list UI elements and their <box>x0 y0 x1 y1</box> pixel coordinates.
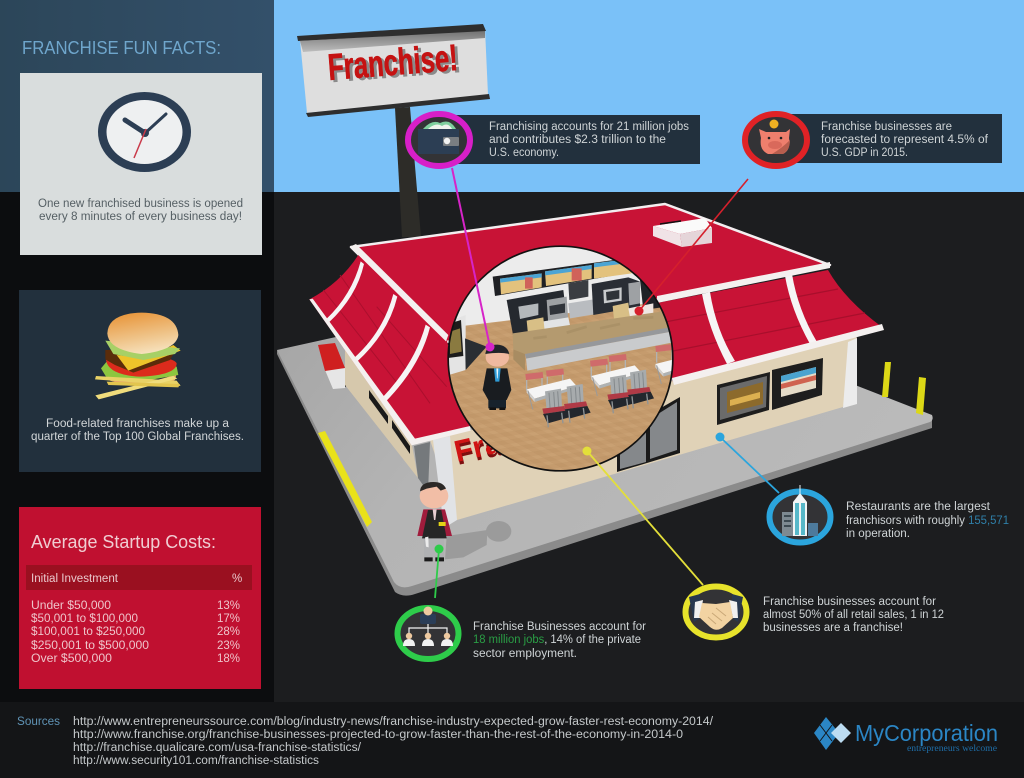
icon: burger and fries <box>95 313 181 399</box>
icon: wallet <box>408 114 470 166</box>
table rows: $100,001 to $250,000 <box>31 626 145 638</box>
right awning <box>657 262 884 385</box>
yellow pointer line <box>582 446 703 585</box>
callout: jobs and trillion <box>408 114 700 166</box>
service counter <box>513 309 677 371</box>
callout text: franchisors with roughly 155,571 <box>846 515 1009 527</box>
icon: clock <box>98 92 191 172</box>
source links <box>73 716 714 767</box>
fact text: quarter of the Top 100 Global Franchises. <box>31 431 244 443</box>
fact text <box>38 198 243 223</box>
fact text <box>31 418 244 443</box>
table rows: Under $50,000 <box>31 600 111 612</box>
front row grey chairs <box>542 370 654 427</box>
back row red chairs <box>525 344 673 391</box>
magenta pointer line <box>452 168 494 352</box>
person outside shop <box>417 482 511 561</box>
yellow post 1 <box>882 362 891 397</box>
sign post <box>395 107 421 237</box>
table header: Initial Investment <box>31 573 119 585</box>
dining tables <box>526 360 672 410</box>
icon: handshake <box>686 586 746 638</box>
callout text: U.S. GDP in 2015. <box>821 147 908 159</box>
left wall windows <box>369 390 410 454</box>
red Fra lettering: Fra <box>452 429 505 472</box>
callout text <box>473 621 646 660</box>
interior magnifier circle <box>447 245 674 472</box>
source links: http://www.security101.com/franchise-statistics <box>73 755 319 767</box>
table rows: $250,001 to $500,000 <box>31 640 149 652</box>
icon: office buildings <box>770 485 830 542</box>
panel: average startup costs <box>19 507 261 689</box>
trash bin <box>318 343 351 389</box>
source links: http://franchise.qualicare.com/usa-franchise-statistics/ <box>73 742 362 754</box>
franchise sign: Franchise! <box>326 37 459 88</box>
callout: private sector jobs <box>398 606 646 660</box>
callout text: forecasted to represent 4.5% of <box>821 134 989 146</box>
logo tagline: entrepreneurs welcome <box>907 744 997 754</box>
left wall display <box>449 320 486 375</box>
table rows: Over $500,000 <box>31 653 112 665</box>
door column <box>414 436 457 528</box>
left wall <box>345 350 418 478</box>
callout: US GDP <box>745 114 1002 166</box>
callout text: Franchise Businesses account for <box>473 621 646 633</box>
callout text: and contributes $2.3 trillion to the <box>489 134 666 146</box>
fact text: every 8 minutes of every business day! <box>39 211 242 223</box>
kitchen equipment <box>506 277 660 334</box>
table rows: 17% <box>217 613 240 625</box>
callout text: businesses are a franchise! <box>763 622 903 634</box>
table rows: 28% <box>217 626 240 638</box>
source links: http://www.franchise.org/franchise-businesses-projected-to-grow-faster-than-the-rest-of-the-economy-in-2014-0 <box>73 729 683 741</box>
red Fra lettering: Fra <box>451 426 504 469</box>
green pointer line <box>434 544 444 598</box>
logo mark <box>814 717 851 750</box>
callout text: 18 million jobs, 14% of the private <box>473 634 641 646</box>
person shadow <box>445 521 511 559</box>
menu window <box>772 358 823 410</box>
red pointer line <box>634 179 748 316</box>
menu boards <box>492 260 632 296</box>
franchise sign <box>297 24 490 117</box>
table rows: 18% <box>217 653 240 665</box>
callout box <box>776 114 1002 163</box>
table rows: $50,001 to $100,000 <box>31 613 138 625</box>
sources label: Sources <box>17 716 60 728</box>
callout text: almost 50% of all retail sales, 1 in 12 <box>763 609 944 621</box>
callout text: Franchising accounts for 21 million jobs <box>489 121 689 133</box>
source links: http://www.entrepreneurssource.com/blog/industry-news/franchise-industry-expected-grow-faster-rest-economy-2014/ <box>73 716 714 728</box>
callout: retail sales <box>686 586 944 638</box>
callout text: U.S. economy. <box>489 147 559 159</box>
manager figure <box>483 345 511 410</box>
building <box>309 204 884 528</box>
yellow post 2 <box>916 377 926 415</box>
heading: franchise fun facts: FRANCHISE FUN FACTS: <box>22 37 221 58</box>
table rows <box>31 600 240 665</box>
logo wordmark: MyCorporation <box>855 720 998 746</box>
callout text <box>763 596 944 634</box>
sidewalk platform <box>277 335 933 596</box>
callout text: Restaurants are the largest <box>846 501 991 513</box>
callout text: Franchise businesses account for <box>763 596 936 608</box>
table header: % <box>232 573 242 585</box>
callout text <box>489 121 689 159</box>
icon: piggy bank <box>745 114 807 166</box>
panel: food fact <box>19 290 261 472</box>
table title: Average Startup Costs: <box>31 532 216 552</box>
table rows: 23% <box>217 640 240 652</box>
icon: org chart <box>398 606 458 659</box>
callout text <box>821 121 989 159</box>
callout: restaurants <box>770 485 1009 542</box>
fact text: Food-related franchises make up a <box>46 418 230 430</box>
left awning <box>309 244 471 445</box>
table header <box>26 565 252 590</box>
food window <box>717 372 770 425</box>
yellow curb <box>318 431 372 527</box>
roof vent box <box>653 218 712 247</box>
blue pointer line <box>716 432 779 493</box>
person figure <box>417 482 452 561</box>
callout text: in operation. <box>846 528 910 540</box>
glass door <box>617 397 680 472</box>
sources <box>17 716 714 767</box>
fact text: One new franchised business is opened <box>38 198 243 210</box>
panel: clock fact <box>20 73 262 255</box>
corner pillar <box>843 338 857 408</box>
callout box <box>439 115 700 164</box>
main red roof <box>351 204 830 342</box>
floor tiles <box>450 304 672 470</box>
front wall <box>430 336 857 520</box>
logo: MyCorporation <box>814 717 998 754</box>
callout text: sector employment. <box>473 648 577 660</box>
callout text: Franchise businesses are <box>821 121 952 133</box>
callout text <box>846 501 1009 540</box>
franchise sign: Franchise! <box>329 39 462 90</box>
table rows: 13% <box>217 600 240 612</box>
